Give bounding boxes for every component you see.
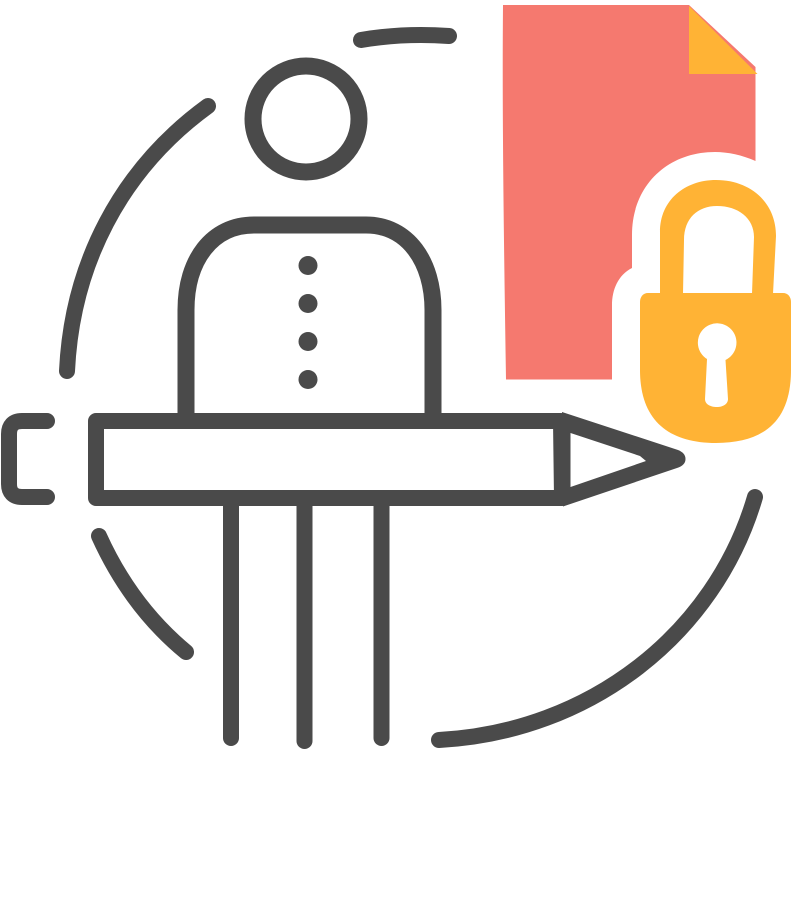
icon: person body xyxy=(186,225,433,418)
icon: person head xyxy=(253,66,359,172)
icon: person legs xyxy=(231,505,382,741)
icon: padlock xyxy=(640,180,791,443)
icon: pencil xyxy=(96,412,686,506)
icon: body buttons xyxy=(298,256,318,389)
icon: red document xyxy=(503,5,758,380)
icon: dashed circle arc segments xyxy=(67,35,755,740)
icon: pencil end cap xyxy=(9,421,47,497)
